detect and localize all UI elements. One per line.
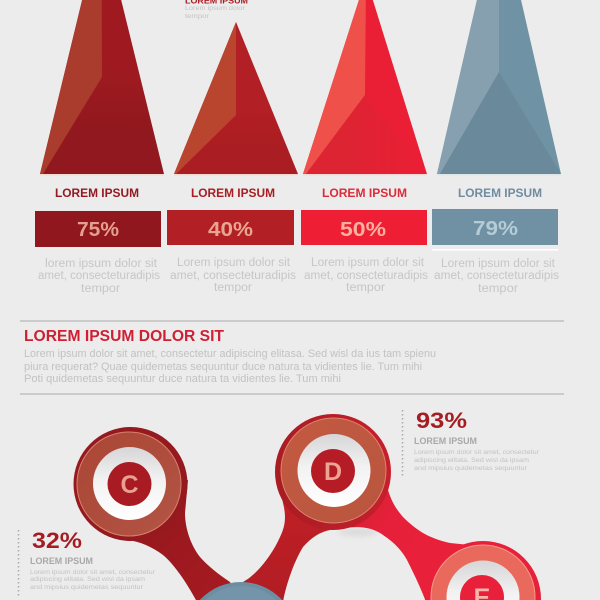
column 3 description: tempor [346,282,385,294]
connector: C to blue [120,480,240,600]
callout 32%: and mipsius quidemetas sequuntur [30,584,144,591]
callout 32%: LOREM IPSUM [30,556,93,566]
callout 93%: 93% [416,408,467,433]
node D: D [324,458,342,486]
node D [275,414,391,530]
bar 79%: 79% [473,218,518,240]
column 2 description: Lorem ipsum dolor sit [177,257,291,269]
column 4 description [434,258,559,295]
top cropped caption: Lorem ipsum dolor [185,6,245,12]
section heading: LOREM IPSUM DOLOR SIT [24,328,225,345]
bar 40% [167,210,294,245]
bar 75% [35,211,161,247]
column 3 description [304,257,428,294]
connected circle diagram [74,414,541,600]
node E [425,541,541,600]
column 1 description: lorem ipsum dolor sit [45,258,158,270]
shadow under D [338,528,378,536]
column 2 label: LOREM IPSUM [191,186,275,200]
connector: D to blue [235,480,362,600]
column 2 description [170,257,296,294]
connector: D to E [345,485,470,600]
callout 32%: adipiscing elitata. Sed wisl da ipsam [30,576,145,583]
bar 79% [432,209,558,250]
callout 93%: Lorem ipsum dolor sit amet, consectetur [414,449,540,456]
pyramid 1 [40,0,164,176]
bar 75%: 75% [77,219,119,241]
section paragraph: Poti quidemetas sequuntur duce natura ta vidientes lie. Tum mihi [24,373,341,385]
callout 93%: adipiscing elitata. Sed wisl da ipsam [414,457,529,464]
callout 32%: 32% [32,528,82,553]
column 4 description: Lorem ipsum dolor sit [441,258,556,270]
column 2 description: amet, consecteturadipis [170,270,296,282]
node C: C [120,471,139,499]
column 3 label: LOREM IPSUM [322,186,407,200]
callout 32%: Lorem ipsum dolor sit amet, consectetur [30,569,156,576]
column 1 label: LOREM IPSUM [55,186,139,200]
column 3 description: amet, consecteturadipis [304,270,428,282]
bar 40%: 40% [208,219,253,241]
section paragraph: Lorem ipsum dolor sit amet, consectetur adipiscing elitasa. Sed wisl da ius tam spienu [24,348,436,360]
column 2 description: tempor [214,282,252,294]
column 4 description: tempor [478,283,518,295]
column 1 description: amet, consecteturadipis [38,270,160,282]
column 1 description [38,258,160,295]
column 4 label: LOREM IPSUM [458,186,542,200]
node C [74,427,188,541]
bar 50%: 50% [340,219,386,241]
column 3 description: Lorem ipsum dolor sit [311,257,425,269]
callout 93% [402,408,540,476]
section paragraph [24,348,436,385]
pyramid 3 [303,0,427,176]
top cropped caption: tempor [185,14,209,20]
pyramid 2 [174,22,298,176]
node blue [185,582,297,600]
callout 93%: LOREM IPSUM [414,436,477,446]
callout 93%: and mipsius quidemetas sequuntur [414,465,528,472]
pyramid 4 [437,0,561,176]
column 4 description: amet, consecteturadipis [434,270,559,282]
column 1 description: tempor [81,283,120,295]
bar 50% [301,210,427,245]
section paragraph: piura requerat? Quae quidemetas sequuntur duce natura ta vidientes lie. Tum mihi [24,361,422,373]
callout 32% [18,528,156,596]
top cropped caption [185,0,248,20]
